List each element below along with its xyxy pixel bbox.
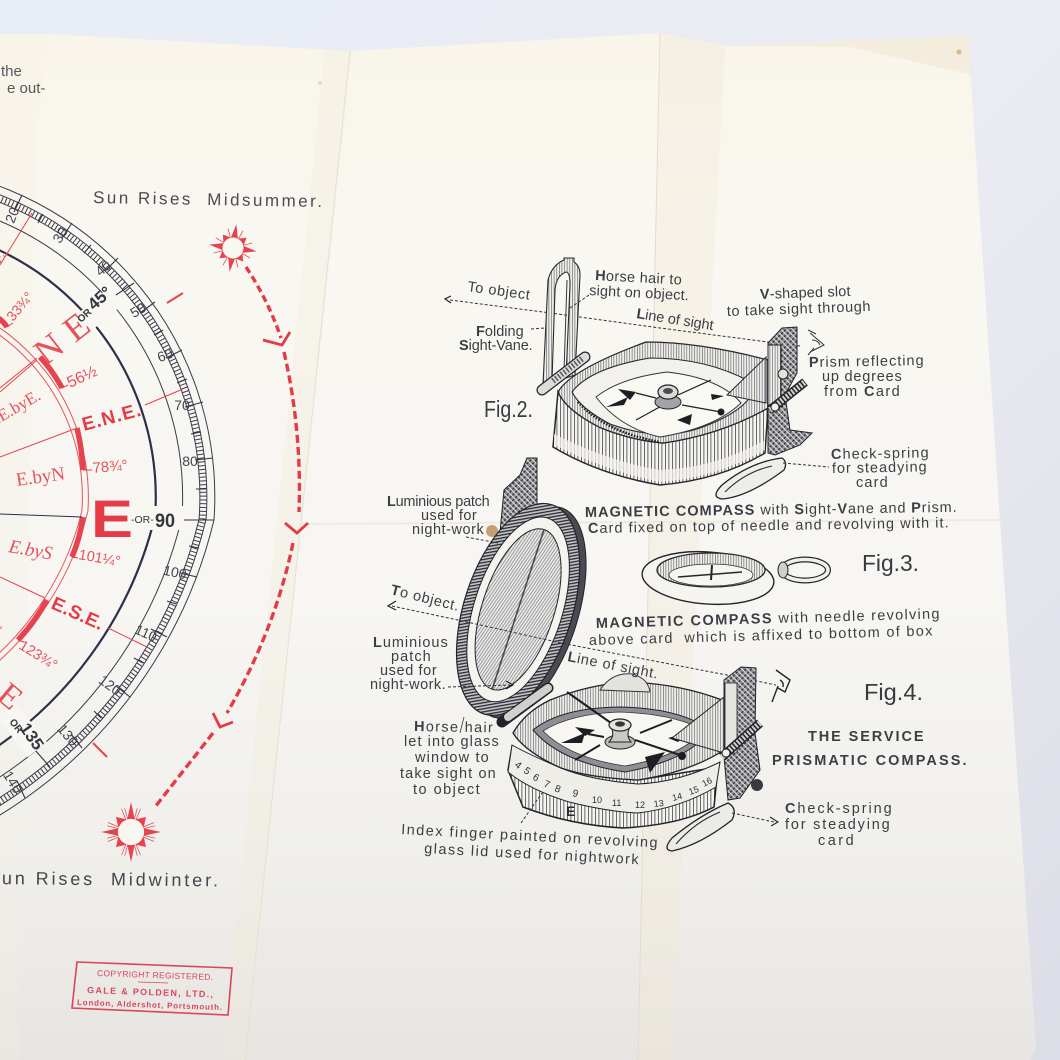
- sight vane: [543, 258, 580, 385]
- pointers: [448, 537, 774, 823]
- top-left text fragment: [1, 63, 45, 97]
- line of sight: [450, 300, 800, 346]
- figure 4 labels: night-work.: [370, 677, 446, 693]
- scale band with numbers: 15: [687, 784, 700, 797]
- prism block and bracket: [768, 327, 812, 455]
- OR 135 label: OR: [7, 717, 25, 736]
- figure 2 labels: card: [856, 475, 888, 491]
- compass card: [596, 372, 741, 437]
- paper masks behind dial labels: [0, 288, 184, 757]
- figure 4 labels: card: [818, 833, 854, 849]
- figure 2 labels: V-shaped slot: [760, 284, 851, 303]
- figure 2 labels: sight on object.: [589, 283, 689, 304]
- check spring: [716, 458, 786, 499]
- copyright box: GALE & POLDEN, LTD.,: [87, 985, 213, 999]
- figure 2 labels: Horse hair to: [595, 268, 683, 289]
- scale band with numbers: 14: [671, 791, 683, 803]
- figure 4 labels: glass lid used for nightwork: [424, 841, 640, 868]
- top-left text fragment: e out-: [7, 80, 45, 97]
- scale band with numbers: 9: [571, 788, 580, 800]
- red bearing labels: [0, 243, 143, 674]
- red rhumb lines and thick ring segments: [0, 213, 183, 757]
- pivot: [655, 385, 681, 409]
- figure 2 labels: up degrees: [822, 369, 902, 385]
- scale band with numbers: E: [566, 803, 575, 819]
- red bearing labels: 33¾°: [3, 288, 36, 324]
- figure 3 labels: MAGNETIC COMPASS with needle revolving: [596, 606, 940, 632]
- figure 4 labels: to object: [413, 782, 480, 798]
- lid: [433, 488, 609, 733]
- figure 4 labels: take sight on: [400, 766, 496, 782]
- hinge cylinder: [542, 357, 585, 390]
- figure 3 labels: above card which is affixed to bottom of box: [589, 623, 933, 649]
- scale band with numbers: 11: [612, 798, 621, 808]
- scale band with numbers: 6: [530, 772, 541, 785]
- figure 3: pocket compass: [640, 547, 828, 609]
- red bearing labels: E.byN: [15, 463, 67, 491]
- scale band with numbers: [508, 745, 720, 819]
- degree numbers: 60: [155, 345, 175, 365]
- figure 2 caption: MAGNETIC COMPASS with Sight-Vane and Prism.: [585, 500, 957, 521]
- card needles: [561, 692, 690, 773]
- figure 4 labels: let into glass: [404, 734, 499, 750]
- degree numbers: 30: [49, 224, 71, 246]
- degree numbers: 40: [92, 257, 114, 279]
- sun path dashed arrow: [155, 267, 308, 807]
- red bearing labels: E.N.E.: [80, 400, 143, 436]
- figure 4 labels: used for: [421, 508, 477, 524]
- degree numbers: 100: [162, 562, 188, 582]
- prism triangle: [672, 697, 724, 753]
- card needles: [606, 380, 724, 425]
- prism triangle: [727, 357, 766, 403]
- degree numbers: 80: [182, 453, 198, 469]
- degree numbers: [0, 205, 198, 796]
- figure 4 labels: Horse hair: [414, 719, 493, 736]
- figure 2 labels: from Card: [824, 384, 900, 400]
- figure 4 labels: Index finger painted on revolving: [401, 822, 658, 851]
- red bearing labels: E.byS: [6, 536, 54, 565]
- red bearing labels: 78¾°: [92, 457, 128, 477]
- icon: midwinter sun: [101, 802, 161, 862]
- sight tab: [500, 458, 537, 532]
- figure 2 caption: Card fixed on top of needle and revolving with it.: [588, 515, 949, 537]
- figure 2 labels: Fig.2.: [484, 396, 533, 422]
- OR 135 label: 135: [16, 719, 48, 754]
- arrow and pointers: [445, 296, 451, 303]
- scale band with numbers: 10: [592, 795, 602, 805]
- eye sketch: [772, 670, 790, 702]
- figure 4 labels: Luminious: [373, 635, 448, 651]
- pivot: [605, 719, 635, 749]
- heading: sun rises midsummer: Sun Rises Midsummer.: [93, 188, 322, 211]
- figure 4 labels: Line of sight.: [566, 649, 660, 682]
- compass rose dial: [0, 165, 215, 880]
- eye sketch: [808, 330, 824, 355]
- figure 4 labels: PRISMATIC COMPASS.: [772, 753, 967, 769]
- degree numbers: 120: [96, 672, 124, 698]
- check spring: [667, 803, 734, 851]
- red bearing labels: E.S.E.: [48, 593, 107, 635]
- OR 45 label: 45°: [84, 283, 116, 314]
- figure 2 caption: [585, 500, 957, 537]
- red bearing labels: 123¾°: [16, 638, 60, 674]
- figure 2 labels: Sight-Vane.: [459, 338, 533, 354]
- degree numbers: 140: [0, 768, 26, 796]
- figure 4 labels: window to: [414, 750, 489, 766]
- figure 2 labels: Line of sight: [635, 306, 715, 334]
- scale band with numbers: 16: [700, 775, 714, 789]
- figure 4 labels: night-work: [412, 522, 484, 538]
- figure 4 labels: Check-spring: [785, 801, 892, 817]
- line of sight: [392, 606, 776, 685]
- figure 4 labels: [370, 494, 967, 868]
- OR 90 label: -OR-: [131, 514, 154, 526]
- cardinal point E: E: [91, 490, 133, 549]
- prism block and bracket: [722, 667, 763, 800]
- copyright box: COPYRIGHT REGISTERED.: [97, 968, 213, 982]
- figure 2 labels: Folding: [476, 324, 524, 340]
- degree ticks: [14, 195, 214, 798]
- scale band with numbers: 5: [521, 765, 532, 778]
- figure 4 labels: Fig.4.: [864, 679, 923, 705]
- figure 4 labels: for steadying: [785, 817, 890, 833]
- red bearing labels: 56½: [65, 363, 100, 392]
- figure 3 labels: Fig.3.: [862, 550, 919, 576]
- hinge: [502, 688, 548, 722]
- OR 90 label: [131, 511, 175, 532]
- figure 2 labels: To object: [466, 279, 531, 304]
- copyright box: London, Aldershot, Portsmouth.: [77, 998, 222, 1012]
- scale band with numbers: 7: [542, 779, 552, 791]
- figure 3 labels: [589, 550, 940, 649]
- scale band with numbers: 4: [512, 760, 524, 772]
- compass card: [533, 707, 710, 772]
- scale band with numbers: 13: [653, 798, 664, 809]
- scale band with numbers: 12: [635, 800, 645, 810]
- top-left text fragment: the: [1, 63, 22, 80]
- compass body side wall: [553, 392, 768, 485]
- degree numbers: 70: [174, 397, 190, 413]
- red bearing labels: 101¼°: [77, 547, 122, 570]
- degree numbers: 110: [133, 621, 160, 645]
- OR 90 label: 90: [155, 511, 175, 532]
- figure 4 labels: Luminious patch: [387, 494, 490, 510]
- OR 45 label: OR: [76, 306, 95, 325]
- figure 2 labels: for steadying: [832, 459, 927, 477]
- figure 2 labels: Prism reflecting: [809, 353, 924, 371]
- figure 4 labels: To object.: [389, 582, 461, 615]
- cardinal point NE: N E: [26, 304, 98, 372]
- figure 2: compass with sight-vane: [445, 258, 829, 499]
- figure 2 labels: to take sight through: [727, 299, 871, 320]
- compass rim back wall: [558, 342, 768, 443]
- scale band with numbers: 8: [553, 783, 562, 796]
- suspension ring: [778, 560, 828, 580]
- figure 4 labels: used for: [380, 663, 437, 679]
- figure 4 labels: THE SERVICE: [808, 729, 924, 745]
- figure 4 labels: patch: [391, 649, 431, 665]
- figure 2 labels: [459, 268, 929, 491]
- degree numbers: 130: [54, 721, 82, 749]
- copyright box: [72, 962, 232, 1015]
- rim back wall: [513, 682, 724, 780]
- compass lower body: [508, 747, 718, 828]
- figure 2 labels: Check-spring: [831, 445, 929, 463]
- figure 4: service prismatic compass: [388, 458, 790, 851]
- degree numbers: 20: [2, 205, 22, 225]
- OR 45 label: [76, 283, 116, 325]
- degree numbers: 50: [127, 299, 149, 321]
- icon: midsummer sun: [206, 221, 260, 275]
